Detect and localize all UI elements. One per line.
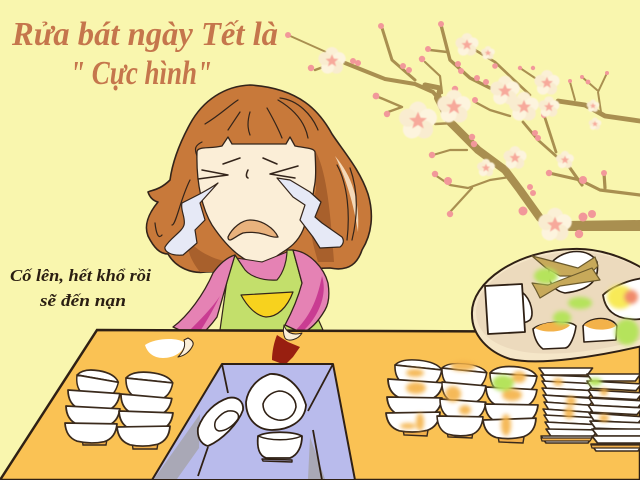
small dish right xyxy=(583,318,617,342)
egg dish xyxy=(603,278,640,319)
food stains on dishes xyxy=(400,361,609,436)
sauce right xyxy=(584,319,616,330)
small dish left xyxy=(533,322,576,349)
dirty plate large xyxy=(246,374,306,430)
woman hands xyxy=(145,325,302,365)
tilted plate ring xyxy=(215,411,239,431)
plate stacks xyxy=(539,368,640,451)
mug handle xyxy=(520,292,532,323)
fish plate xyxy=(549,252,598,293)
plate inner ring xyxy=(263,391,296,420)
title: " Cực hình" xyxy=(70,55,212,92)
foot rings xyxy=(82,438,158,449)
sleeve shadows xyxy=(187,276,324,337)
sink xyxy=(152,364,355,480)
blossom branch xyxy=(285,21,640,241)
apron xyxy=(220,250,323,330)
left hand xyxy=(178,338,193,357)
tray edge xyxy=(472,249,640,361)
apron pocket xyxy=(241,292,293,317)
hair xyxy=(146,85,371,272)
blossoms xyxy=(318,33,601,241)
right sleeve xyxy=(285,250,329,333)
face xyxy=(197,137,316,262)
fish lower xyxy=(532,268,600,298)
cuff xyxy=(283,325,302,340)
hair highlight xyxy=(335,156,358,232)
title xyxy=(11,16,278,92)
eyes and brows xyxy=(198,158,298,179)
tear right xyxy=(277,178,343,248)
clean bowl stacks xyxy=(65,367,174,449)
food stains on tray xyxy=(534,268,639,345)
hair shadow xyxy=(188,150,334,272)
dirty plate tilted xyxy=(198,398,243,446)
speech text xyxy=(10,266,151,310)
woman crying xyxy=(146,85,371,338)
title: Rửa bát ngày Tết là xyxy=(11,16,278,53)
sink basin xyxy=(152,364,355,480)
dirty bowl stacks xyxy=(386,358,538,443)
speech text: sẽ đến nạn xyxy=(39,291,126,310)
table xyxy=(0,330,640,480)
buds xyxy=(285,21,609,238)
red cloth xyxy=(272,335,300,365)
tear left xyxy=(165,183,218,255)
bowl in sink xyxy=(258,432,302,458)
chest xyxy=(236,250,300,285)
tray surface xyxy=(476,252,640,354)
speech text: Cố lên, hết khổ rồi xyxy=(10,266,151,285)
branch wood xyxy=(288,25,640,218)
sauce left xyxy=(535,322,570,332)
left sleeve xyxy=(173,255,235,338)
branch stump xyxy=(565,220,640,231)
crying mouth xyxy=(228,220,278,240)
foot rings xyxy=(403,429,524,443)
bowl in hand xyxy=(145,339,185,358)
bowl rim xyxy=(258,436,302,462)
food tray xyxy=(472,249,640,361)
sink inner lines xyxy=(198,364,333,480)
hair strands xyxy=(155,98,356,240)
sink shading xyxy=(154,414,325,479)
mug xyxy=(485,284,525,334)
fish upper xyxy=(532,256,598,276)
